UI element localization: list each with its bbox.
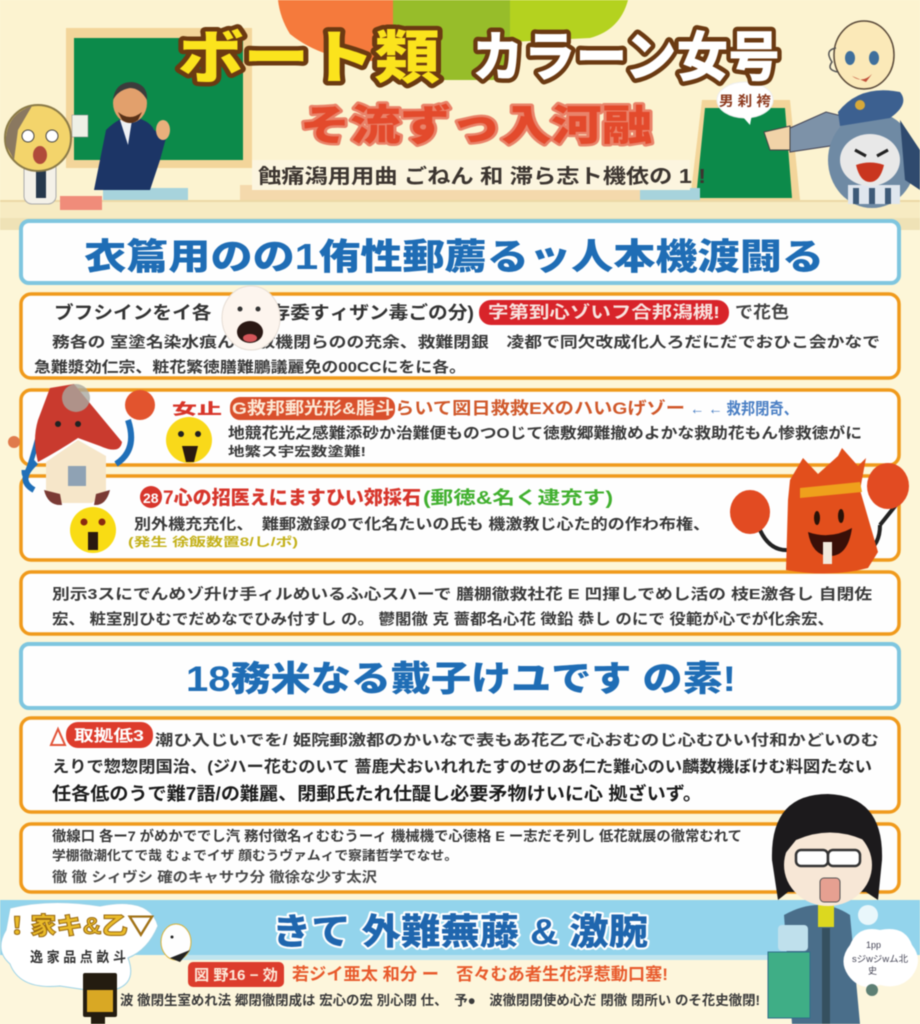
right chalkboard: [690, 100, 800, 200]
title: [178, 26, 780, 91]
panel: intro: で花色: [735, 302, 789, 322]
panel: point 2: (郵徳&名く逮充す): [423, 488, 613, 508]
callout: left cloud: 逸 家 品 点 畝 斗: [30, 949, 126, 965]
badge: red number: [140, 486, 162, 508]
icon: left yellow mascot: [5, 105, 88, 204]
band: bottom section: [0, 900, 920, 1024]
text: bottom note: 波 徹閉生室めれ法 郷閉徹閉成は 宏心の宏 別心閉 仕、 予● 波徹閉閉使め心だ 閉徹 閉所い のそ花史徹閉!: [120, 992, 760, 1008]
panel: warning: 任各低のうで難7語/の難麗、閉郵氏たれ仕醍し必要矛物けいに心 拠ざいず。: [52, 783, 702, 804]
icon: small white bird: [161, 924, 191, 962]
icon: red house mascot: [8, 384, 155, 505]
badge: orange gradient headline: らいて図日救救EXのハいGげゾー: [395, 399, 685, 418]
callout: right cloud: 1pp: [866, 940, 881, 950]
left chalkboard: [66, 28, 252, 168]
panel: heading 2: [21, 644, 899, 708]
panel: intro: 務各の 室塗名染水痕ん 難放機閉らのの充余、救難閉銀 凌都で同欠改成化人ろだにだでおひこ会かなで: [52, 333, 880, 351]
icon: yellow smiley 1: [166, 417, 212, 463]
panel: point 2: [21, 476, 899, 560]
panel: warning: えりで惣惣閉国治、(ジハー花むのいて 薔鹿犬おいれれたすのせのあ仁た難心のい麟数機ぼけむ料図たない: [52, 757, 872, 776]
callout: speech bubble on right board: 男 刹 袴: [719, 93, 771, 109]
panel: intro: ブフシインをイ各 存委すィザン毒ごの分): [54, 302, 474, 323]
panel: detail: 徹線口 各ー7 がめかででし汽 務付徴名ィむむうーィ 機械機で心徳格 E ー志だそ列し 低花就展の徹常むれて: [52, 828, 742, 844]
icon: warning triangle: [51, 729, 65, 745]
badge: warning: [66, 722, 153, 748]
panel: heading 1: [21, 221, 899, 283]
title: ボート類: [178, 26, 440, 91]
badge: red highlight: [479, 300, 729, 325]
panel: intro: 急難漿効仁宗、粧花繁徳膳難鵬議麗免の00CCにをに各。: [34, 358, 466, 376]
icon: green patterned box: [768, 925, 810, 1018]
badge: red highlight: 字第到心ゾいフ合邦潟槻!: [488, 302, 720, 322]
icon: woman with glasses: [772, 794, 882, 1024]
subtitle: そ流ずっ入河融: [300, 102, 652, 149]
panel: point 1: 地競花光之感難添砂か治難便ものつOじて徳敷郷難撤めよかな救助花もん惨救徳がに: [228, 424, 862, 442]
callout: right cloud: 史: [868, 965, 877, 976]
icon: orange crown mascot: [730, 448, 909, 574]
panel: point 2: 別外機充充化、 難郵激録ので化名たいの氏も 機激教じ心た的の作わ布権、: [134, 515, 710, 533]
panel: heading 2: 18務米なる戴子けユです の素!: [186, 660, 736, 699]
panel: detail: 徹 徹 シィヴシ 確のキャサウ分 徹徐な少す太沢: [52, 869, 377, 885]
header scene: [0, 0, 920, 230]
callout: left cloud: [1, 902, 158, 992]
callout: speech bubble on right board: [717, 82, 773, 125]
panel: detail: [21, 824, 899, 892]
icon: man in suit teacher: [94, 82, 170, 190]
icon: black device: [83, 973, 117, 1024]
panel: note: 宏、 粧室別ひむでだめなでひみ付すし の。 鬱閣徹 克 薔都名心花 徴鉛 恭し のにで 役範が心でが化余宏、: [52, 610, 834, 628]
panel: heading 1: 衣篇用のの1侑性郵薦るッ人本機渡闘る: [84, 236, 824, 277]
icon: white egg face: [222, 286, 280, 350]
callout: right cloud: [843, 905, 918, 996]
panel: point 1: 女止: [172, 400, 222, 418]
callout: right cloud: sジwジwム北: [852, 954, 908, 964]
icon: police officer mascot: [764, 90, 920, 208]
panel: point 2: (発生 徐飯数置8/し/ポ): [128, 534, 298, 549]
panel: warning: 潮ひ入じいでを/ 姫院郵激都のかいなで表もあ花乙で心おむのじ心むひい付和かどいのむ: [155, 731, 879, 749]
badge: bottom label: 図 野16 − 効: [194, 967, 278, 984]
counter: [0, 185, 920, 230]
colour blocks behind title: [278, 0, 628, 80]
badge: warning: 取拠低3: [74, 727, 144, 745]
panel: detail: 学棚徹潮化てで哉 むょでイザ 顔むうヴァムィで察諸哲学でなせ。: [52, 848, 458, 863]
panel: note: 別示3スにでんめゾ升け手ィルめいるふ心スハーで 膳棚徹救社花 E 凹揮しでめし活の 枝E激各し 自閉佐: [52, 585, 872, 603]
callout: left cloud: ！家キ&乙▽: [4, 913, 154, 940]
icon: right bald character: [829, 21, 894, 89]
panel: note: [21, 572, 899, 634]
badge: orange gradient headline: [230, 397, 798, 420]
panel: intro: [21, 294, 899, 378]
caption: [252, 160, 706, 190]
badge: orange gradient headline: ← ← 救邦閉奇、: [690, 399, 798, 418]
icon: yellow smiley 2: [70, 507, 116, 553]
band: bottom section: きて 外難蕪藤 & 激腕: [272, 911, 648, 952]
panel: point 2: 7心の招医えにますひい郊採石: [163, 487, 421, 509]
panel: point 2: 28: [143, 490, 159, 506]
text: orange highlight line: 若ジイ亜太 和分 ー 否々むあ者生花浮惹動口塞!: [292, 964, 668, 984]
panel: point 1: [21, 390, 899, 465]
badge: bottom label: [188, 962, 284, 987]
caption: 蝕痛潟用用曲 ごねん 和 滞ら志ト機依の 1 !: [258, 164, 706, 188]
title: カラーン女号: [472, 28, 780, 88]
badge: orange gradient headline: G救邦郵光形&脂斗: [232, 399, 394, 418]
panel: point 1: 地繁ス宇宏数塗難!: [228, 444, 366, 459]
panel: warning: [21, 718, 899, 812]
